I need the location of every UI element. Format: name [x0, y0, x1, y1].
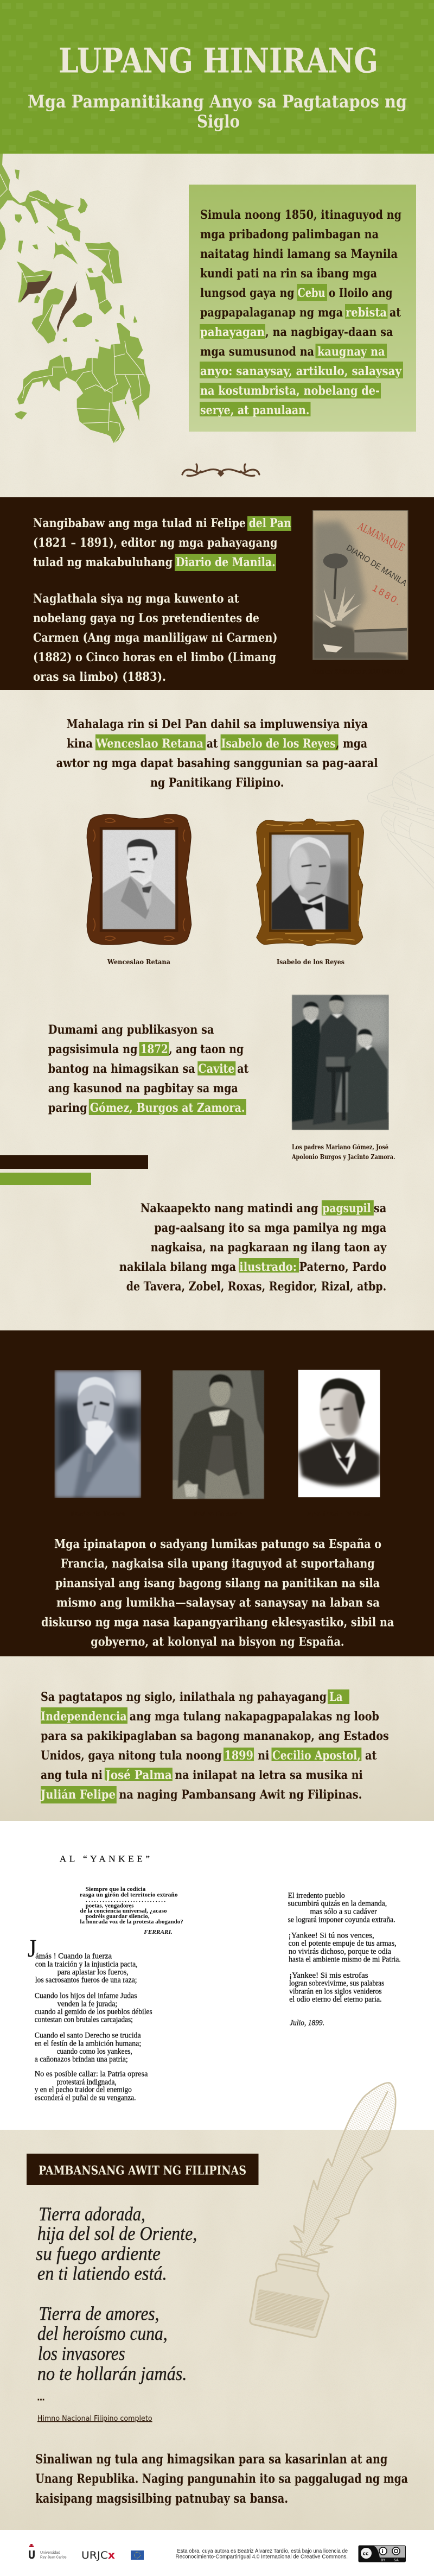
text: 1872 publications: , ang taon ng — [169, 1042, 244, 1056]
anthem verses: hija del sol de Oriente, — [37, 2223, 197, 2244]
poem right column: ¡Yankee! Si mis estrofas — [289, 1971, 368, 1980]
logo: Universidad Rey Juan Carlos: Rey Juan Carlos — [40, 2555, 67, 2560]
subtitle — [28, 91, 407, 131]
epigraph: FERRARI. — [143, 1929, 173, 1935]
framed portrait: Wenceslao Retana — [87, 814, 192, 945]
intro paragraph: kundi pati na rin sa ibang mga — [200, 267, 377, 281]
text: La Independencia: na inilapat na letra sa musika ni — [175, 1768, 363, 1782]
Del Pan text: oras sa limbo) (1883). — [33, 670, 166, 684]
licence text: Esta obra, cuya autora es Beatriz Álvarez Tardío, está bajo una licencia de — [177, 2547, 348, 2554]
caption: Apolinario Mabini: Apolinario Mabini — [307, 1510, 371, 1518]
text: La Independencia: 1899 — [224, 1749, 253, 1763]
text: the ilustrados: sa — [374, 1201, 387, 1216]
text: 1872 publications: paring — [48, 1101, 87, 1115]
intro paragraph: rebista — [346, 306, 387, 320]
poem left column: venden la fe jurada; — [58, 1999, 117, 2008]
text: 1872 publications: Gómez, Burgos at Zamora. — [90, 1101, 245, 1115]
poem left column: cuando al gemido de los pueblos débiles — [35, 2008, 152, 2016]
panel: poem Al Yankee on white — [0, 1821, 434, 2130]
anthem verses: del heroísmo cuna, — [37, 2322, 168, 2344]
text: La Independencia: José Palma — [105, 1768, 172, 1782]
epigraph — [80, 1886, 183, 1935]
title: LUPANG HINIRANG — [59, 40, 378, 80]
anthem verses: Tierra de amores, — [39, 2303, 159, 2325]
Del Pan text — [33, 516, 291, 684]
text: La Independencia: Independencia — [41, 1710, 127, 1724]
poem left column: ámás ! Cuando la fuerza — [35, 1952, 112, 1961]
text: the ilustrados: Nakaapekto nang matindi ang — [141, 1201, 318, 1216]
subtitle: Siglo — [197, 111, 240, 131]
poem left column: protestará indignada, — [57, 2078, 117, 2086]
text: the ilustrados: pag-aalsang ito sa mga pamilya ng mga — [154, 1221, 387, 1235]
poem left column: Cuando los hijos del infame Judas — [35, 1992, 137, 2001]
logo: Universidad Rey Juan Carlos: U — [28, 2548, 36, 2561]
Del Pan text: Diario de Manila. — [176, 555, 276, 569]
text: 1872 publications: 1872 — [141, 1042, 168, 1056]
logo: EU flag — [131, 2550, 144, 2560]
epigraph: ............................. — [86, 1897, 165, 1904]
intro paragraph: naitatag hindi lamang sa Maynila — [200, 247, 398, 261]
poem right column: se logrará imponer coyunda extraña. — [288, 1915, 395, 1924]
exiles paragraph: mismo ang lumikha—salaysay at sanaysay na laban sa — [56, 1596, 380, 1610]
intro paragraph: mga pribadong palimbagan na — [200, 227, 379, 242]
poem right column: logran sobrevivirme, sus palabras — [289, 1979, 385, 1988]
text: the ilustrados: pagsupil — [322, 1201, 371, 1216]
caption: priests — [291, 1143, 395, 1161]
intro paragraph: anyo: sanaysay, artikulo, salaysay — [200, 364, 402, 378]
poem right column: sucumbirá quizás en la demanda, — [288, 1900, 387, 1908]
poem right column: ¡Yankee! Si tú nos vences, — [289, 1931, 374, 1940]
link: full anthem: Himno Nacional Filipino completo — [37, 2414, 152, 2423]
text: Del Pan influence: , mga — [336, 737, 367, 751]
logo: Universidad Rey Juan Carlos: Universidad — [40, 2550, 60, 2555]
Del Pan text: Nangibabaw ang mga tulad ni Felipe — [33, 516, 246, 530]
intro paragraph: kaugnay na — [317, 345, 385, 359]
exiles paragraph: Francia, nagkaisa sila upang itaguyod at suportahang — [61, 1557, 375, 1571]
poem left column: contestan con brutales carcajadas; — [35, 2015, 133, 2024]
closing paragraph: kaisipang magsisilbing patnubay sa bansa. — [35, 2491, 288, 2506]
text: La Independencia — [40, 1689, 389, 1803]
caption: Isabelo de los Reyes: Isabelo de los Reyes — [277, 958, 344, 966]
caption: Wenceslao Retana: Wenceslao Retana — [107, 958, 170, 966]
exiles paragraph: gobyerno, at kolonyal na bisyon ng España. — [91, 1635, 344, 1649]
intro paragraph — [200, 208, 402, 417]
anthem verses: no te hollarán jamás. — [37, 2363, 187, 2384]
text: La Independencia: Sa pagtatapos ng siglo, inilathala ng pahayagang — [41, 1690, 327, 1704]
text: the ilustrados: nagkaisa, na pagkaraan ng ilang taon ay — [151, 1240, 387, 1255]
intro paragraph: serye, at panulaan. — [200, 403, 309, 417]
intro paragraph: na kostumbrista, nobelang de- — [200, 384, 380, 398]
highlighted province: Iloilo — [20, 271, 52, 302]
text: 1872 publications: at — [237, 1062, 249, 1076]
text: La Independencia: Cecilio Apostol, — [272, 1749, 361, 1763]
text: La Independencia: ang tula ni — [41, 1768, 103, 1782]
poem left column: No es posible callar: la Patria opresa — [35, 2069, 148, 2078]
text: La Independencia: na naging Pambansang Awit ng Filipinas. — [119, 1788, 362, 1802]
poem left column: Cuando el santo Derecho se trucida — [35, 2031, 141, 2040]
Del Pan text: Naglathala siya ng mga kuwento at — [33, 592, 239, 606]
Del Pan text: del Pan — [249, 516, 291, 530]
epigraph: de la conciencia universal, ¿acaso — [80, 1908, 167, 1914]
text: Del Pan influence: kina — [67, 737, 93, 751]
poem left column: con la traición y la injusticia pacta, — [35, 1960, 138, 1969]
text: the ilustrados: nakilala bilang mga — [119, 1260, 237, 1274]
poem right column: mas sólo a su cadáver — [310, 1908, 377, 1916]
poem right column: El irredento pueblo — [288, 1891, 345, 1900]
anthem verses: los invasores — [38, 2343, 125, 2364]
closing paragraph — [35, 2452, 408, 2506]
caption: priests: Los padres Mariano Gómez, José — [292, 1143, 388, 1151]
footer — [0, 2530, 434, 2576]
poem right column: no vivirás dichoso, porque te odia — [289, 1947, 392, 1956]
badge: CC BY SA: i — [382, 2549, 384, 2555]
poem left column — [28, 1934, 152, 2102]
badge: CC BY SA — [359, 2546, 406, 2562]
Del Pan text: Carmen (Ang mga manliligaw ni Carmen) — [33, 631, 278, 645]
text: La Independencia: Unidos, gaya nitong tula noong — [41, 1749, 222, 1763]
highlighted province: Cebu — [57, 281, 78, 332]
intro paragraph: pahayagan — [200, 325, 265, 339]
photo: the three priests — [292, 995, 390, 1130]
map of Visayas and Mindanao — [0, 154, 150, 444]
text: Del Pan influence: Wenceslao Retana — [95, 737, 203, 751]
anthem verses: ... — [37, 2393, 45, 2403]
books illustration — [367, 755, 434, 889]
text: the ilustrados: de Tavera, Zobel, Roxas, Regidor, Rizal, atbp. — [126, 1280, 386, 1294]
text: 1872 publications — [48, 1023, 249, 1115]
illustration: quill and ink bottle — [250, 2083, 395, 2338]
poem right column: con el potente empuje de tus armas, — [289, 1939, 397, 1948]
header banner — [0, 0, 434, 154]
poem left column: en el festín de la ambición humana; — [35, 2039, 141, 2048]
intro paragraph: pagpapalaganap ng mga — [200, 306, 343, 320]
poem right column: hasta el ambiente mismo de mi Patria. — [289, 1955, 401, 1964]
badge: CC BY SA: SA — [394, 2558, 399, 2562]
Del Pan text: nobelang gaya ng Los pretendientes de — [33, 611, 259, 625]
text: the ilustrados — [119, 1200, 387, 1294]
text: Del Pan influence — [56, 717, 378, 790]
highlights — [175, 516, 291, 571]
text: Del Pan influence: Isabelo de los Reyes — [221, 737, 336, 751]
ornament flourish — [182, 464, 259, 476]
text: 1872 publications: Dumami ang publikasyon sa — [48, 1023, 214, 1037]
intro paragraph: Cebu — [297, 286, 326, 300]
badge: CC BY SA: BY — [381, 2558, 385, 2562]
epigraph: podréis guardar silencio, — [86, 1913, 150, 1920]
text: Del Pan influence: awtor ng mga dapat basahing sanggunian sa pag-aaral — [56, 756, 378, 770]
intro paragraph: at — [390, 306, 401, 320]
caption: priests: Apolonio Burgos y Jacinto Zamora. — [291, 1153, 395, 1161]
intro paragraph: o Iloilo ang — [329, 286, 393, 300]
anthem verses — [36, 2203, 197, 2403]
poem right column: vibrarán en los siglos venideros — [289, 1987, 382, 1996]
logo: URJCx: URJCx — [81, 2549, 115, 2561]
text: La Independencia: at — [365, 1749, 377, 1763]
licence text — [176, 2547, 348, 2560]
text: La Independencia: Julián Felipe — [40, 1788, 116, 1802]
exiles paragraph — [41, 1537, 394, 1649]
text: 1872 publications: ang kasunod na pagbitay sa mga — [48, 1081, 238, 1096]
epigraph: poetas, vengadores — [86, 1902, 133, 1909]
almanac cover image — [312, 510, 409, 660]
highlights — [200, 284, 403, 416]
anthem verses: en ti latiendo está. — [37, 2263, 167, 2284]
text: La Independencia: La — [329, 1690, 343, 1704]
poem left column: a cañonazos brindan una patria; — [35, 2055, 128, 2064]
text: La Independencia: ni — [258, 1749, 269, 1763]
Del Pan text: (1821 – 1891), editor ng mga pahayagang — [33, 536, 278, 550]
intro paragraph: Simula noong 1850, itinaguyod ng — [200, 208, 401, 222]
caption: Pardo de Tavera: Pardo de Tavera — [71, 1510, 125, 1518]
epigraph: rasga un girón del territorio extraño — [80, 1891, 178, 1898]
epigraph: la honrada voz de la protesta abogando? — [80, 1919, 183, 1925]
poem left column: para aplastar los fueros, — [58, 1968, 129, 1977]
photo: Apolinario Mabini — [298, 1370, 380, 1497]
text: La Independencia: ang mga tulang nakapagpapalakas ng loob — [130, 1710, 379, 1724]
epigraph: Siempre que la codicia — [86, 1886, 146, 1893]
poem left column: y en el pecho traidor del enemigo — [35, 2086, 132, 2094]
poem left column: J — [28, 1934, 36, 1963]
framed portrait: Isabelo de los Reyes — [257, 819, 364, 946]
Del Pan text: tulad ng makabuluhang — [33, 555, 173, 569]
anthem verses: su fuego ardiente — [36, 2243, 161, 2264]
badge: CC BY SA: cc — [362, 2552, 368, 2557]
caption: Pedro Paterno: Pedro Paterno — [194, 1510, 242, 1518]
licence text: Reconocimiento-CompartirIgual 4.0 Internacional de Creative Commons. — [176, 2553, 348, 2560]
province borders — [0, 174, 145, 444]
poem right column — [288, 1891, 401, 2028]
photo: Pedro Paterno — [173, 1370, 264, 1499]
panel: Del Pan dark band — [0, 497, 434, 690]
text: 1872 publications: bantog na himagsikan sa — [48, 1062, 195, 1076]
cover lettering: ALMANAQUE — [356, 520, 406, 554]
exiles paragraph: pinansiyal ang isang bagong silang na panitikan na sila — [55, 1577, 380, 1591]
text: Del Pan influence: at — [207, 737, 218, 751]
poem left column: los sacrosantos fueros de una raza; — [35, 1976, 137, 1985]
exiles paragraph: Mga ipinatapon o sadyang lumikas patungo sa España o — [54, 1537, 381, 1552]
text: the ilustrados: Paterno, Pardo — [299, 1260, 386, 1274]
poem right column: Julio, 1899. — [290, 2019, 324, 2028]
photo: Pardo de Tavera — [55, 1370, 141, 1498]
intro paragraph: lungsod gaya ng — [200, 286, 295, 300]
Del Pan text: (1882) o Cinco horas en el limbo (Limang — [33, 650, 276, 664]
text: the ilustrados: ilustrado: — [239, 1260, 297, 1274]
text: Del Pan influence: Mahalaga rin si Del Pan dahil sa impluwensiya niya — [66, 717, 368, 731]
almanac cover image: DIARIO DE MANILA — [344, 543, 409, 588]
text: Del Pan influence: ng Panitikang Filipino. — [150, 776, 284, 790]
poem right column: el odio eterno del eterno paria. — [289, 1995, 382, 2004]
logo: Universidad Rey Juan Carlos — [28, 2544, 67, 2561]
poem title: AL “YANKEE” — [60, 1854, 150, 1864]
panel: exiles dark band — [0, 1330, 434, 1656]
poem left column: cuando como los yankees, — [57, 2047, 132, 2056]
almanac cover image: 1880. — [371, 583, 403, 607]
banner: Pambansang Awit — [27, 2154, 258, 2185]
anthem verses: Tierra adorada, — [39, 2203, 145, 2225]
decorative bars — [0, 1155, 148, 1185]
poem left column: esconderá el puñal de su venganza. — [35, 2093, 136, 2102]
panel: intro text box — [189, 185, 416, 432]
text: 1872 publications: pagsisimula ng — [48, 1042, 138, 1056]
intro paragraph: , na nagbigay-daan sa — [265, 325, 393, 339]
text: 1872 publications: Cavite — [198, 1062, 235, 1076]
banner: Pambansang Awit: PAMBANSANG AWIT NG FILIPINAS — [39, 2164, 246, 2178]
intro paragraph: mga sumusunod na — [200, 345, 314, 359]
